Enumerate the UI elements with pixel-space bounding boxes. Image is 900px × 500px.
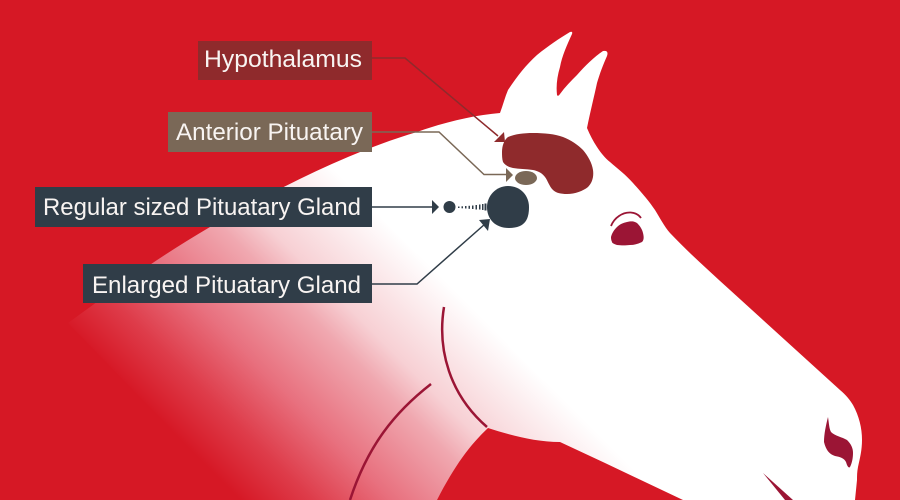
label: regular sized pituatary gland: Regular sized Pituatary Gland xyxy=(43,194,361,221)
arrow: enlarged pituitary gland xyxy=(372,219,490,284)
enlarged pituitary gland xyxy=(487,186,529,228)
arrow: anterior pituitary xyxy=(372,132,513,182)
arrow: regular pituitary gland xyxy=(372,200,439,214)
label: anterior pituatary xyxy=(168,112,372,152)
label: enlarged pituatary gland xyxy=(83,264,372,303)
neck muscle line xyxy=(350,384,431,500)
icon: nostril xyxy=(824,417,853,467)
label: hypothalamus xyxy=(198,41,372,80)
jaw line xyxy=(763,473,793,500)
label: regular sized pituatary gland xyxy=(35,187,372,227)
label: hypothalamus: Hypothalamus xyxy=(204,46,362,73)
regular pituitary gland xyxy=(444,201,456,213)
neck crease line xyxy=(442,307,487,427)
dotted growth indicator xyxy=(458,204,486,210)
arrow: hypothalamus xyxy=(372,58,505,142)
label: enlarged pituatary gland: Enlarged Pituatary Gland xyxy=(92,272,361,299)
hypothalamus shape xyxy=(502,133,593,194)
anterior pituitary shape xyxy=(515,171,537,185)
icon: eye xyxy=(611,212,644,245)
label: anterior pituatary: Anterior Pituatary xyxy=(176,119,363,146)
